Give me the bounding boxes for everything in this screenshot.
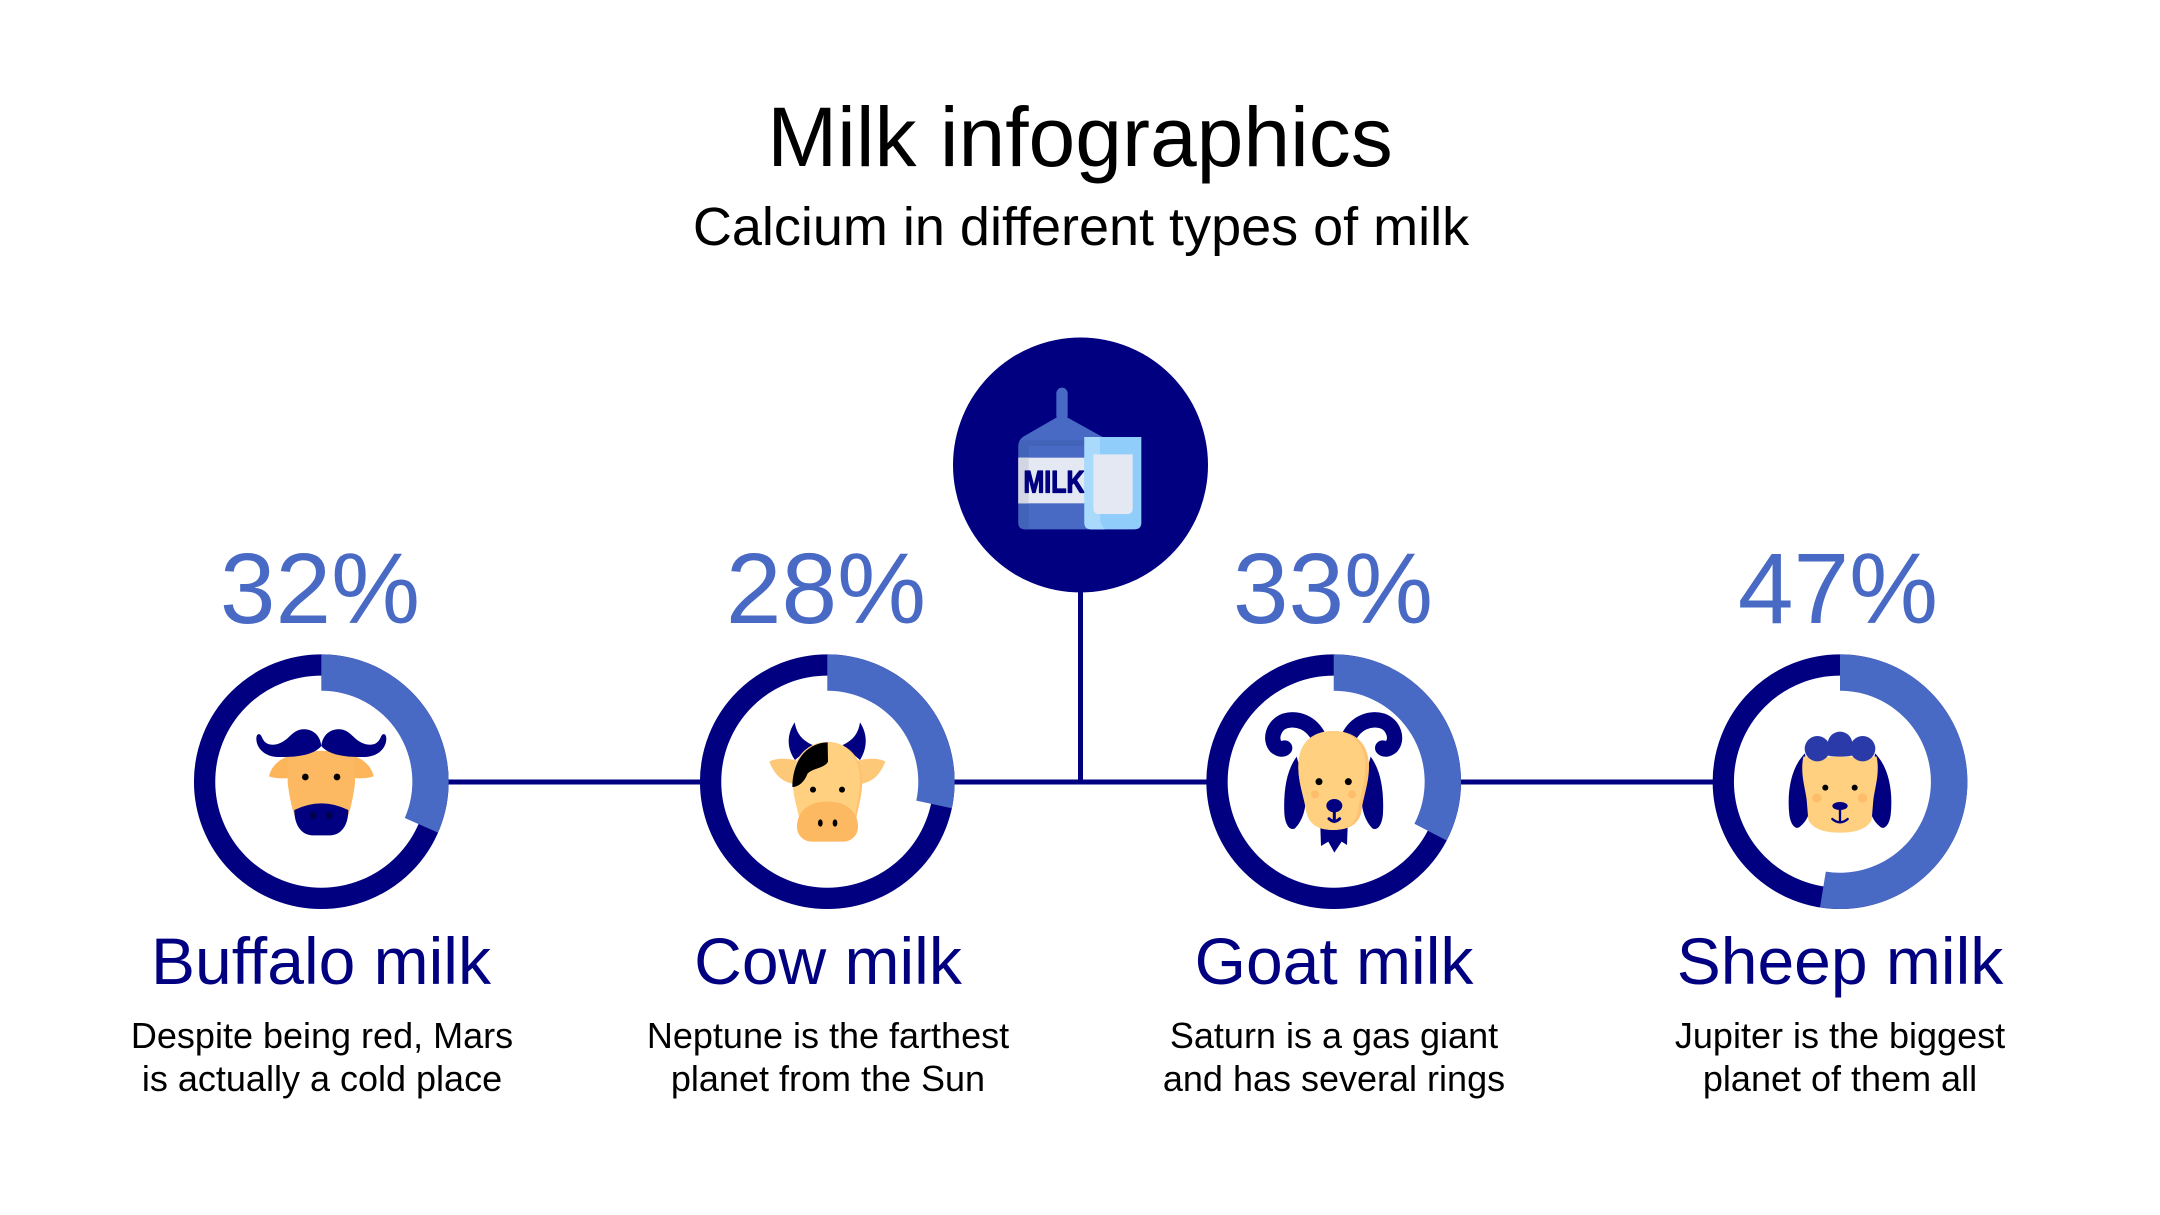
icon: milk carton and glass bbox=[1018, 388, 1141, 529]
donut chart bbox=[1723, 654, 1967, 909]
title: Milk infographics bbox=[767, 90, 1393, 184]
donut chart bbox=[711, 654, 955, 898]
icon: goat bbox=[1273, 720, 1395, 853]
description: Neptune is the farthest bbox=[647, 1015, 1009, 1056]
icon: buffalo bbox=[256, 729, 386, 835]
subtitle: Calcium in different types of milk bbox=[693, 197, 1470, 257]
panel: cow milk bbox=[647, 533, 1009, 1099]
label: Cow milk bbox=[694, 924, 963, 998]
label: Sheep milk bbox=[1677, 924, 2004, 998]
percentage: 33% bbox=[1233, 533, 1433, 645]
connector lines bbox=[321, 465, 1840, 782]
description: Despite being red, Mars bbox=[131, 1015, 513, 1056]
description: is actually a cold place bbox=[142, 1058, 502, 1099]
donut chart bbox=[1217, 654, 1461, 898]
donut chart bbox=[205, 654, 449, 898]
percentage: 28% bbox=[726, 533, 926, 645]
description: planet of them all bbox=[1703, 1058, 1977, 1099]
icon: sheep bbox=[1789, 732, 1891, 833]
percentage: 32% bbox=[220, 533, 420, 645]
label: Goat milk bbox=[1195, 924, 1474, 998]
description: Jupiter is the biggest bbox=[1675, 1015, 2005, 1056]
central milk icon bbox=[953, 338, 1208, 592]
label: Buffalo milk bbox=[151, 924, 492, 998]
percentage: 47% bbox=[1738, 533, 1938, 645]
icon: milk carton and glass: MILK bbox=[1023, 465, 1085, 500]
panel: goat milk bbox=[1163, 533, 1505, 1099]
description: planet from the Sun bbox=[671, 1058, 985, 1099]
panel: sheep milk bbox=[1675, 533, 2005, 1099]
circle badge bbox=[953, 338, 1208, 592]
description: Saturn is a gas giant bbox=[1170, 1015, 1498, 1056]
icon: cow bbox=[769, 722, 885, 842]
panel: buffalo milk bbox=[131, 533, 513, 1099]
description: and has several rings bbox=[1163, 1058, 1505, 1099]
